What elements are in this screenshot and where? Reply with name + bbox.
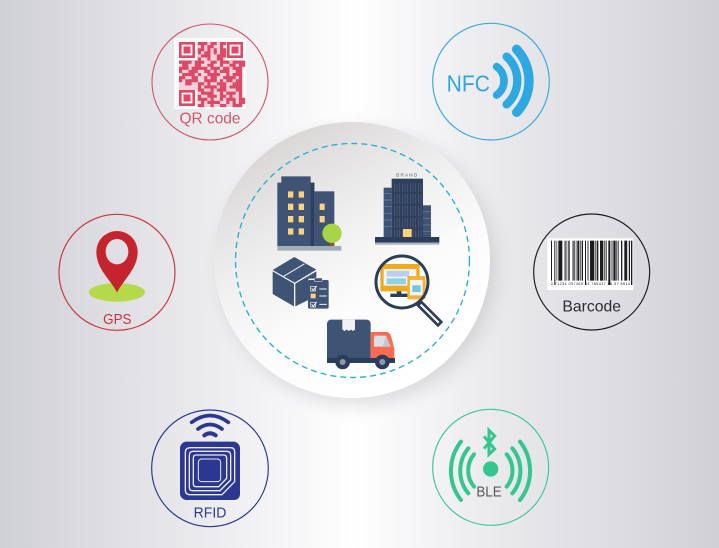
icon: brand tower bbox=[375, 173, 439, 245]
icon: delivery truck bbox=[327, 320, 395, 369]
badge: QR code bbox=[152, 24, 268, 140]
badge: Barcode bbox=[534, 214, 650, 330]
badge: Barcode: 0 71234 057465 34 785437 86 57 8510 bbox=[551, 282, 630, 286]
badge: RFID bbox=[152, 410, 268, 527]
badge: BLE: BLE bbox=[476, 484, 502, 501]
badge: BLE bbox=[433, 409, 549, 525]
badge: NFC: NFC bbox=[447, 70, 490, 96]
icon: office building with tree bbox=[277, 176, 342, 251]
badge: QR code: QR code bbox=[180, 110, 241, 128]
icon: brand tower: BRAND bbox=[396, 173, 418, 178]
badge: Barcode: Barcode bbox=[562, 299, 621, 316]
QR code pattern bbox=[179, 42, 245, 107]
icon: parcel and checklist bbox=[273, 257, 329, 309]
badge: RFID: RFID bbox=[194, 504, 226, 521]
badge: GPS: GPS bbox=[103, 311, 131, 328]
badge: GPS bbox=[59, 214, 175, 330]
badge: NFC bbox=[433, 23, 549, 140]
central disc bbox=[214, 122, 496, 405]
icon: magnifier over screens bbox=[375, 255, 441, 325]
